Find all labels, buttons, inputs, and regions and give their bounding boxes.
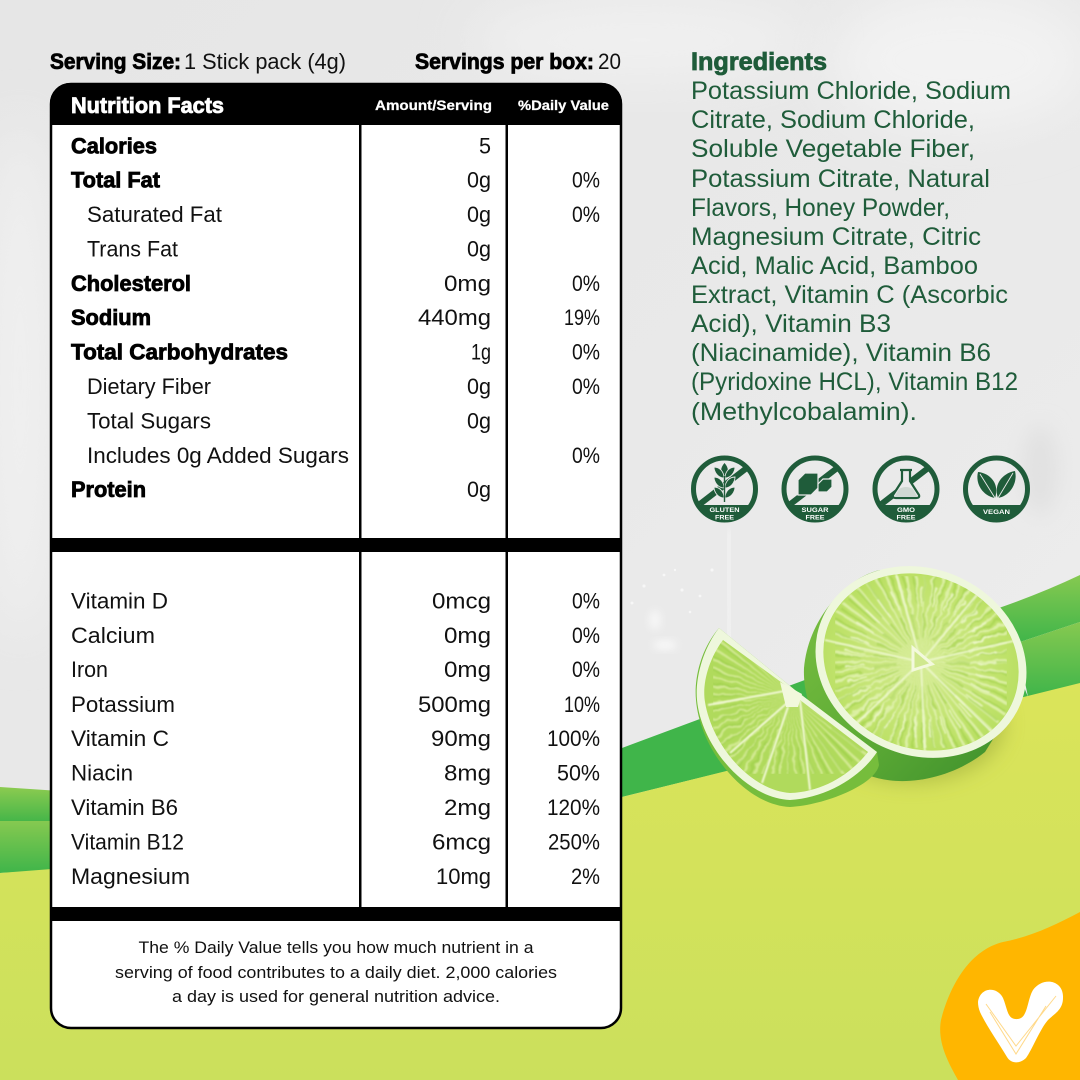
green wave band left [0,787,60,873]
icon: sugar free: SUGAR [802,507,829,514]
brand logo V [978,982,1063,1062]
nutrient names, vitamins and minerals: Vitamin B12 [71,830,184,854]
icon: vegan: VEGAN [983,509,1010,516]
serving size line [50,49,346,74]
nutrient names, macros: Trans Fat [87,236,178,262]
icon: gmo free [875,458,937,522]
footnote: a day is used for general nutrition advice. [172,987,500,1006]
amounts, vitamins and minerals: 8mg [444,760,491,786]
ingredients list: Flavors, Honey Powder, [691,194,950,222]
amounts, macros: 0mg [444,271,491,296]
ingredients list [691,77,1018,426]
table body [51,84,621,1028]
daily values, vitamins and minerals: 250% [548,830,600,854]
nutrient names, macros: Total Sugars [87,408,211,434]
daily values, vitamins and minerals: 100% [547,726,600,751]
daily values, macros: 19% [564,305,600,330]
orange corner blob [940,912,1080,1080]
lime flesh [823,573,1019,751]
table header: %Daily Value [518,97,609,113]
lime peel [804,570,1005,781]
ingredients list: Acid, Malic Acid, Bamboo [691,252,978,280]
servings per box: Servings per box: [415,49,594,74]
footnote: serving of food contributes to a daily diet. 2,000 calories [115,963,557,982]
nutrient names, macros: Cholesterol [71,271,191,296]
servings per box: 20 [598,49,621,74]
amounts, vitamins and minerals: 500mg [418,692,491,717]
daily values, macros: 0% [572,168,600,192]
daily values, vitamins and minerals: 10% [564,692,600,717]
nutrient names, macros: Protein [71,477,146,502]
amounts, macros: 0g [467,374,491,399]
icon: gluten free: FREE [715,514,735,522]
daily values, vitamins and minerals: 50% [557,760,600,786]
amounts, macros: 440mg [418,305,491,330]
daily values, vitamins and minerals: 0% [572,588,600,614]
ingredients list: Soluble Vegetable Fiber, [691,135,975,163]
ingredients list: (Pyridoxine HCL), Vitamin B12 [691,368,1018,396]
icon: gluten free: GLUTEN [710,507,740,514]
nutrient names, macros: Sodium [71,305,151,330]
ingredients list: Citrate, Sodium Chloride, [691,106,975,134]
amounts, macros: 0g [467,477,491,502]
nutrient names, vitamins and minerals: Iron [71,657,108,682]
icon: gmo free: FREE [896,514,916,522]
table header: Nutrition Facts [71,93,224,118]
wedge flesh [704,640,868,793]
daily values, vitamins and minerals [547,588,600,889]
icon: gmo free: GMO [897,507,915,514]
nutrient names, vitamins and minerals: Vitamin B6 [71,795,178,820]
ingredients list: Magnesium Citrate, Citric [691,223,981,251]
footnote [115,938,557,1006]
nutrient names, macros: Total Carbohydrates [71,340,288,364]
ingredients list: (Niacinamide), Vitamin B6 [691,339,991,367]
amounts, macros: 0g [467,168,491,192]
ingredients list: Potassium Citrate, Natural [691,165,990,193]
amounts, macros: 1g [471,340,491,364]
lime pith [784,532,1058,792]
amounts, macros: 0g [467,408,491,434]
nutrient names, vitamins and minerals: Calcium [71,623,155,648]
amounts, macros [418,134,491,502]
nutrient names, vitamins and minerals: Niacin [71,760,133,786]
nutrient names, vitamins and minerals: Vitamin D [71,588,168,614]
nutrient names, vitamins and minerals: Magnesium [71,864,190,889]
daily values, vitamins and minerals: 0% [572,657,600,682]
serving size line: 1 Stick pack (4g) [184,49,346,74]
nutrient names, macros: Includes 0g Added Sugars [87,443,349,468]
amounts, vitamins and minerals [418,588,491,889]
lime wedge [690,627,880,807]
serving size line: Serving Size: [50,49,181,74]
daily values, macros [564,168,600,468]
amounts, vitamins and minerals: 10mg [436,864,491,889]
nutrient names, vitamins and minerals: Potassium [71,692,175,717]
ingredients heading: Ingredients [691,48,827,76]
column rules and thick bars [50,125,622,921]
ingredients list: Potassium Chloride, Sodium [691,77,1011,105]
daily values, macros: 0% [572,443,600,468]
amounts, vitamins and minerals: 0mcg [432,588,491,614]
yellow-green ground [0,683,1080,1080]
amounts, vitamins and minerals: 90mg [431,726,491,751]
icon: vegan [966,458,1028,520]
daily values, macros: 0% [572,340,600,364]
amounts, macros: 5 [479,134,491,158]
table header: Amount/Serving [375,97,492,113]
amounts, macros: 0g [467,202,491,227]
nutrient names, vitamins and minerals [71,588,190,889]
amounts, vitamins and minerals: 0mg [444,657,491,682]
ingredients list: Acid), Vitamin B3 [691,310,891,338]
green wave band right [622,575,1080,797]
icon: sugar free: FREE [806,514,825,522]
daily values, macros: 0% [572,374,600,399]
panel: nutrition facts table [50,83,622,1028]
nutrient names, macros: Calories [71,134,157,158]
nutrient names, macros: Saturated Fat [87,202,222,227]
lime half [804,566,1026,790]
amounts, macros: 0g [467,236,491,262]
nutrient names, macros: Total Fat [71,168,161,192]
wedge core [780,682,802,707]
daily values, vitamins and minerals: 2% [571,864,600,889]
nutrient names, macros [71,134,349,502]
table header [50,83,622,125]
daily values, vitamins and minerals: 0% [572,623,600,648]
amounts, vitamins and minerals: 2mg [444,795,491,820]
amounts, vitamins and minerals: 0mg [444,623,491,648]
icon: sugar free [784,458,846,522]
icon: gluten free [694,458,756,522]
ingredients list: (Methylcobalamin). [691,398,917,426]
amounts, vitamins and minerals: 6mcg [432,830,491,854]
daily values, macros: 0% [572,202,600,227]
footnote: The % Daily Value tells you how much nutrient in a [138,938,534,957]
daily values, vitamins and minerals: 120% [547,795,600,820]
daily values, macros: 0% [572,271,600,296]
lime core [913,648,932,670]
ingredients list: Extract, Vitamin C (Ascorbic [691,281,1008,309]
nutrient names, vitamins and minerals: Vitamin C [71,726,169,751]
nutrient names, macros: Dietary Fiber [87,374,211,399]
